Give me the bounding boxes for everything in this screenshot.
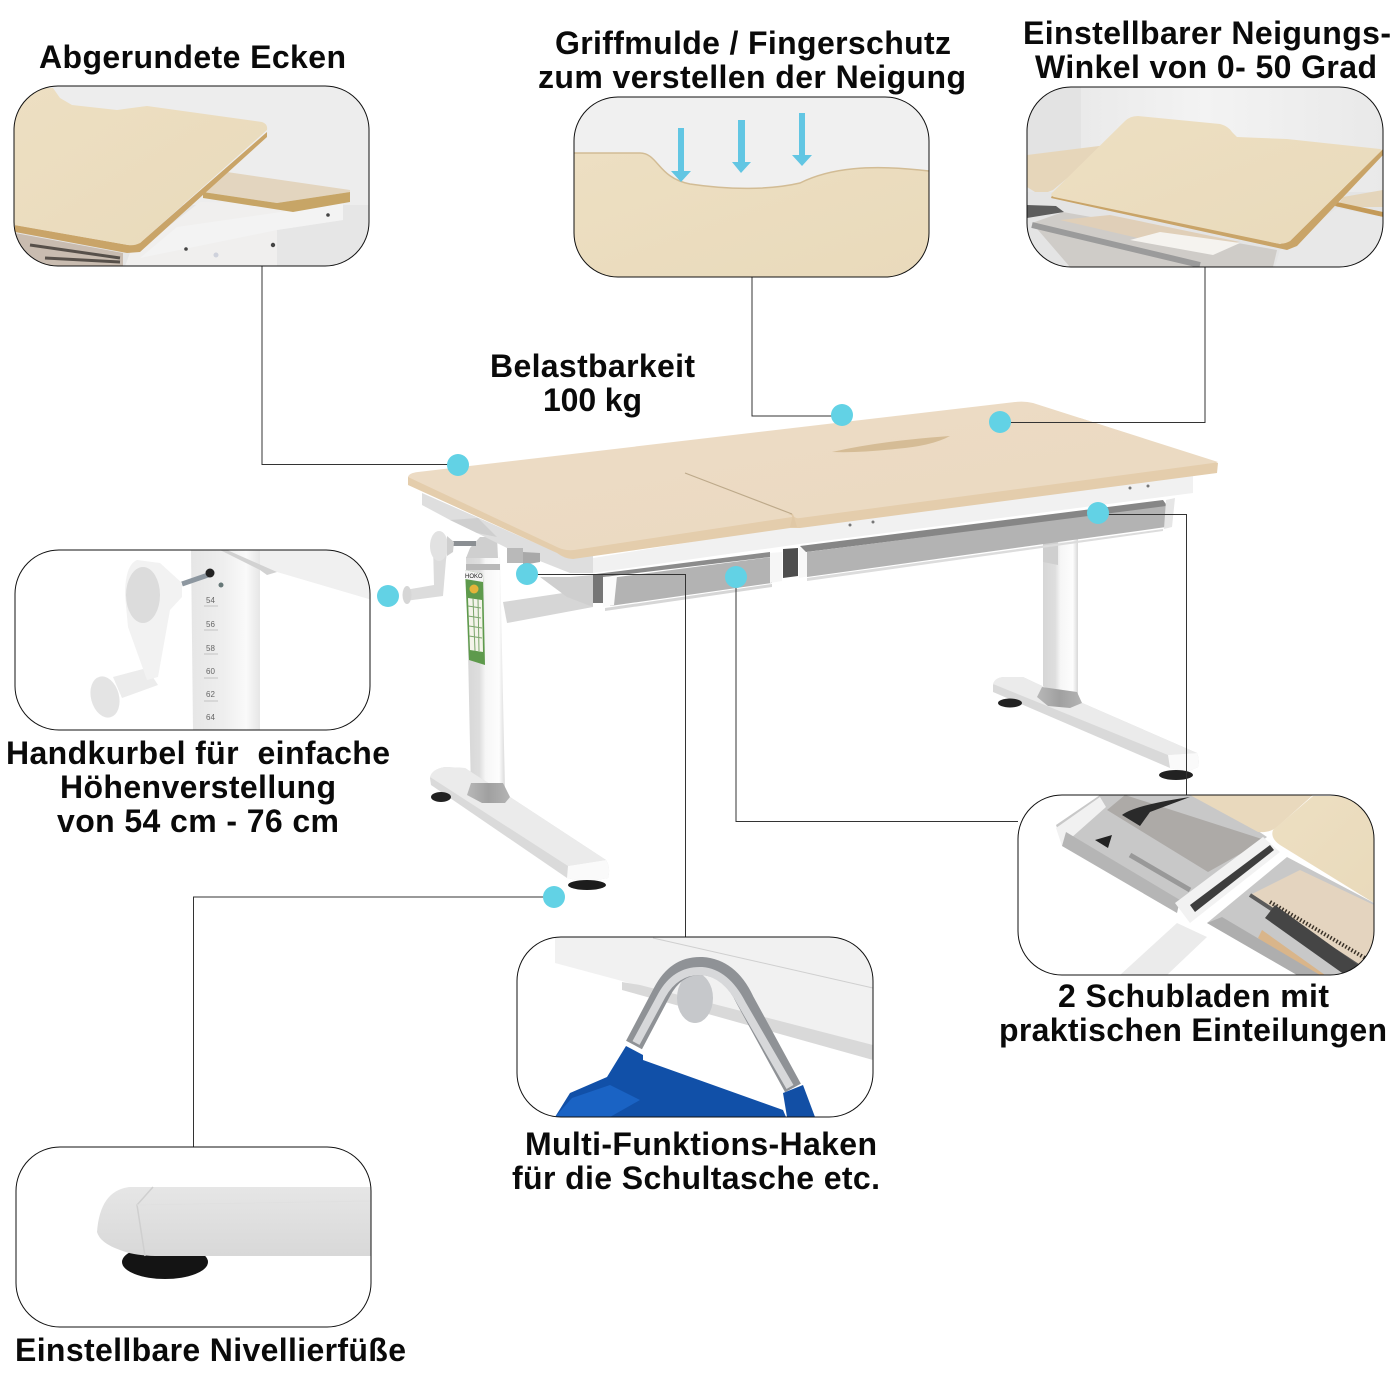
frame under the desktop [422, 476, 1193, 607]
main desk illustration [402, 402, 1218, 890]
hand crank [402, 531, 476, 604]
heading: load capacity: Belastbarkeit [490, 348, 695, 384]
heading: bag hook: für die Schultasche etc. [512, 1160, 880, 1196]
heading: drawers: praktischen Einteilungen [999, 1012, 1387, 1048]
heading: levelling feet: Einstellbare Nivellierfüße [15, 1332, 406, 1368]
heading: bag hook: Multi-Funktions-Haken [525, 1126, 877, 1162]
heading: finger grip: zum verstellen der Neigung [538, 59, 966, 95]
height chart tag [465, 570, 485, 665]
panel: bag hook [517, 937, 873, 1117]
panel: tilt angle [1027, 87, 1383, 267]
heading: rounded corners: Abgerundete Ecken [39, 39, 346, 75]
heading: finger grip: Griffmulde / Fingerschutz [555, 25, 951, 61]
panel: levelling foot [16, 1147, 371, 1327]
heading: tilt angle: Winkel von 0- 50 Grad [1035, 49, 1377, 85]
scale numbers: 64 [206, 713, 215, 722]
right leg [993, 538, 1199, 780]
drawers [593, 498, 1175, 611]
panel: finger grip [574, 97, 929, 277]
scale numbers: 62 [206, 690, 215, 699]
heading: load capacity: 100 kg [543, 382, 642, 418]
height chart tag: HOKO [465, 574, 483, 580]
icon: arrows pointing down [671, 113, 812, 182]
blue marker dots [377, 404, 1109, 908]
desktop [408, 402, 1218, 559]
heading: hand crank: Höhenverstellung [60, 769, 336, 805]
scale numbers: 58 [206, 644, 215, 653]
connector lines [194, 266, 1205, 1147]
scale numbers: 60 [206, 667, 215, 676]
panel: drawers [1018, 795, 1374, 975]
left leg [430, 537, 609, 890]
panel: rounded corners [14, 86, 369, 267]
crossbar [503, 593, 593, 623]
panel: hand crank [15, 550, 372, 730]
heading: hand crank: von 54 cm - 76 cm [57, 803, 339, 839]
heading: drawers: 2 Schubladen mit [1058, 978, 1329, 1014]
scale numbers [204, 596, 218, 722]
scale numbers: 54 [206, 596, 215, 605]
heading: tilt angle: Einstellbarer Neigungs- [1023, 15, 1391, 51]
scale numbers: 56 [206, 620, 215, 629]
heading: hand crank: Handkurbel für einfache [6, 735, 390, 771]
